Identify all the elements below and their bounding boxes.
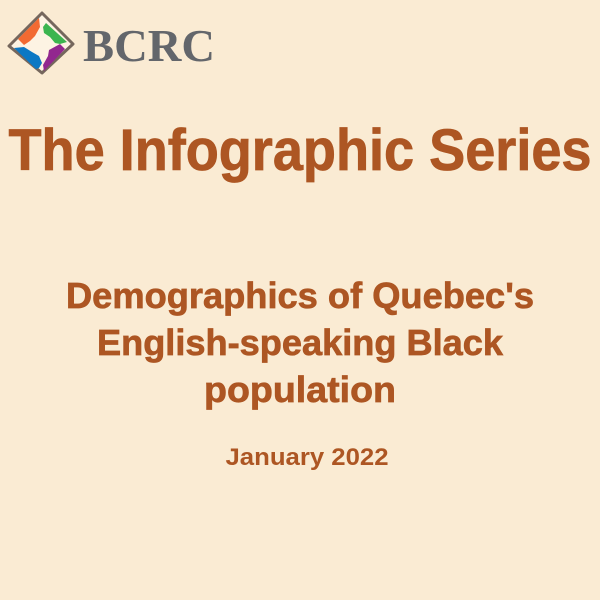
subtitle bbox=[66, 275, 534, 410]
icon: diamond frame with four coloured shapes bbox=[9, 13, 73, 73]
date: January 2022 bbox=[226, 444, 388, 471]
subtitle: population bbox=[204, 369, 396, 410]
logo wordmark: BCRC bbox=[83, 21, 215, 71]
logo: BCRC bbox=[9, 13, 215, 73]
subtitle: Demographics of Quebec's bbox=[66, 275, 534, 316]
subtitle: English-speaking Black bbox=[97, 322, 504, 363]
